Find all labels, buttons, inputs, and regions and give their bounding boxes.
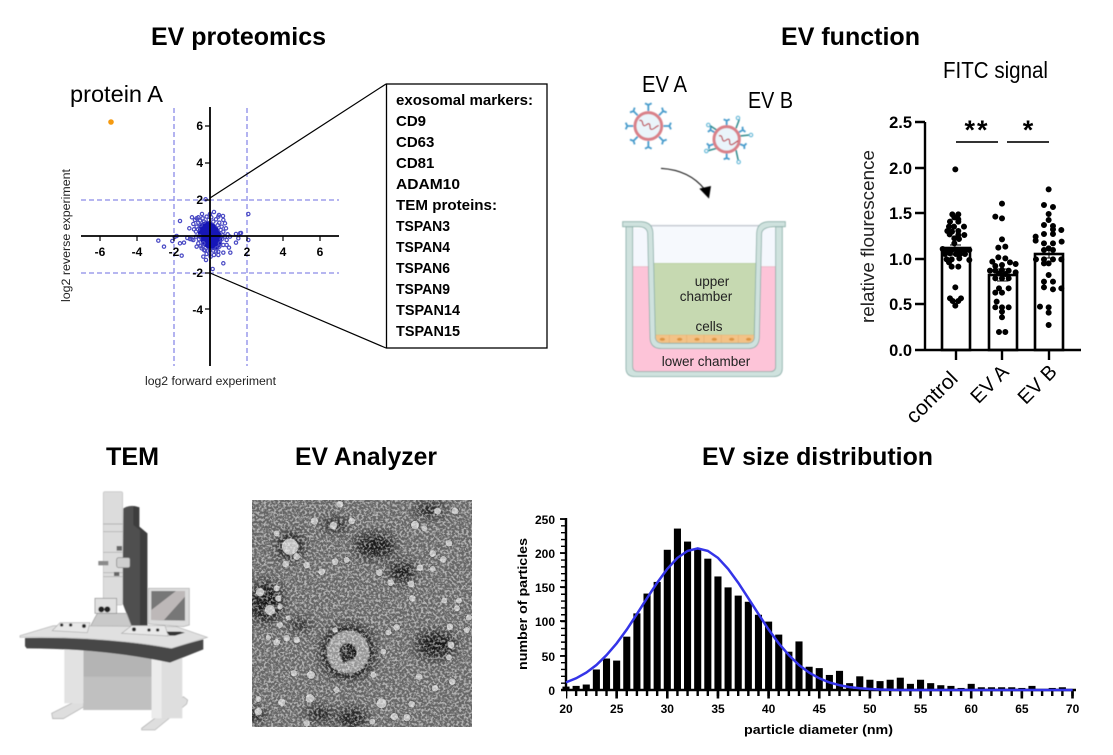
y tick labels: 2 bbox=[196, 193, 203, 207]
y tick labels: 50 bbox=[542, 650, 555, 664]
label: FITC signal: FITC signal bbox=[943, 57, 1048, 83]
transwell labels: chamber bbox=[680, 289, 733, 304]
heading: EV Analyzer: EV Analyzer bbox=[295, 443, 437, 471]
label: EV B: EV B bbox=[748, 87, 793, 113]
transwell labels: cells bbox=[695, 319, 723, 334]
vesicle particles bbox=[254, 501, 472, 727]
protein list box: TSPAN3 bbox=[396, 218, 450, 235]
gaussian fit curve bbox=[566, 548, 1073, 690]
x tick labels: 45 bbox=[813, 702, 826, 716]
zoom connector lines bbox=[210, 84, 386, 348]
y tick labels bbox=[535, 513, 555, 698]
y axis title: log2 reverse experiment bbox=[61, 168, 73, 302]
label: protein A: protein A bbox=[70, 81, 164, 107]
y tick labels: 1.5 bbox=[889, 205, 912, 223]
heading: TEM: TEM bbox=[106, 443, 159, 471]
cell layer bbox=[655, 335, 754, 343]
significance bars bbox=[956, 141, 1049, 143]
y tick labels: 6 bbox=[196, 119, 203, 133]
x tick labels: -2 bbox=[169, 245, 180, 259]
dark stain regions bbox=[245, 504, 456, 727]
protein data points bbox=[157, 198, 250, 271]
histogram bbox=[515, 513, 1080, 737]
scatter axes bbox=[81, 107, 339, 366]
y tick labels: 200 bbox=[535, 547, 555, 561]
y tick labels: 150 bbox=[535, 581, 555, 595]
y tick labels: 2.0 bbox=[889, 160, 912, 178]
x axis title: particle diameter (nm) bbox=[744, 722, 893, 737]
x tick labels: control bbox=[902, 367, 963, 428]
x tick labels: -6 bbox=[95, 245, 106, 259]
transwell labels: lower chamber bbox=[662, 354, 751, 369]
axes and ticks bbox=[915, 122, 1081, 360]
significance stars: ** bbox=[964, 115, 990, 145]
bars bbox=[942, 248, 1063, 350]
y tick labels: 2.5 bbox=[889, 114, 912, 132]
protein list box bbox=[386, 84, 547, 348]
x tick labels: 2 bbox=[244, 245, 251, 259]
y axis title: number of particles bbox=[515, 538, 530, 670]
protein list box: TSPAN14 bbox=[396, 302, 461, 319]
bar chart: relative fluorescence bbox=[858, 114, 1081, 428]
protein list box: CD63 bbox=[396, 134, 434, 151]
x tick labels: EV A bbox=[967, 361, 1014, 408]
grain texture bbox=[252, 500, 472, 727]
y tick labels: 100 bbox=[535, 615, 555, 629]
x tick labels: 55 bbox=[914, 702, 928, 716]
x tick labels: 50 bbox=[863, 702, 877, 716]
protein list box: TSPAN9 bbox=[396, 281, 450, 298]
x tick labels: 70 bbox=[1066, 702, 1080, 716]
histogram axes and ticks bbox=[560, 518, 1076, 695]
micrograph bbox=[245, 500, 472, 727]
y axis title: relative flourescence bbox=[858, 150, 878, 323]
panel: EV Analyzer bbox=[245, 443, 472, 727]
icon: EV B vesicle bbox=[705, 116, 753, 164]
x tick labels bbox=[559, 702, 1080, 716]
upper chamber liquid bbox=[653, 263, 757, 335]
threshold dashed lines bbox=[81, 108, 339, 366]
x tick labels: EV B bbox=[1014, 361, 1062, 409]
y tick labels: 0.5 bbox=[889, 296, 912, 314]
heading: EV function: EV function bbox=[781, 23, 920, 51]
protein list box: TSPAN6 bbox=[396, 260, 450, 277]
x tick labels: 65 bbox=[1015, 702, 1029, 716]
x tick labels: 35 bbox=[711, 702, 725, 716]
transwell diagram bbox=[623, 222, 785, 377]
y tick labels: 1.0 bbox=[889, 251, 912, 269]
y tick labels: 0.0 bbox=[889, 342, 912, 360]
panel: EV size distribution bbox=[515, 443, 1080, 737]
x tick labels: 25 bbox=[610, 702, 624, 716]
protein list box: TEM proteins: bbox=[396, 197, 497, 214]
y tick labels bbox=[889, 114, 912, 360]
membrane bbox=[658, 339, 752, 353]
x tick labels: 6 bbox=[317, 245, 324, 259]
icon: electron microscope bbox=[20, 492, 207, 730]
transwell labels: upper bbox=[695, 274, 730, 289]
panel: EV proteomics bbox=[61, 23, 547, 388]
y tick labels bbox=[192, 119, 203, 317]
protein A point bbox=[108, 119, 114, 125]
y tick labels: 4 bbox=[196, 156, 203, 170]
heading: EV proteomics: EV proteomics bbox=[151, 23, 326, 51]
x tick labels: 4 bbox=[280, 245, 287, 259]
protein list box: ADAM10 bbox=[396, 176, 460, 193]
protein list box: exosomal markers: bbox=[396, 92, 533, 109]
x tick labels: 60 bbox=[965, 702, 978, 716]
y tick labels: -4 bbox=[192, 303, 203, 317]
panel: TEM bbox=[20, 443, 207, 730]
x axis title: log2 forward experiment bbox=[145, 376, 277, 388]
icon: EV A vesicle bbox=[626, 103, 671, 149]
significance stars bbox=[964, 115, 1034, 145]
transwell labels bbox=[662, 274, 751, 369]
y tick labels: -2 bbox=[192, 266, 203, 280]
arrow bbox=[661, 168, 711, 199]
x tick labels bbox=[902, 361, 1062, 428]
x tick labels: -4 bbox=[132, 245, 143, 259]
x tick labels bbox=[95, 245, 324, 259]
label: EV A: EV A bbox=[642, 71, 688, 97]
panel: EV function bbox=[623, 23, 1081, 428]
y tick labels: 0 bbox=[548, 684, 555, 698]
x tick labels: 30 bbox=[661, 702, 674, 716]
y tick labels: 250 bbox=[535, 513, 555, 527]
protein list box: CD81 bbox=[396, 155, 434, 172]
histogram bars bbox=[562, 529, 1066, 690]
x tick labels: 20 bbox=[559, 702, 573, 716]
heading: EV size distribution: EV size distribution bbox=[702, 443, 933, 471]
x tick labels: 40 bbox=[762, 702, 776, 716]
error bars bbox=[950, 245, 1055, 281]
significance stars: * bbox=[1023, 115, 1034, 145]
insert walls bbox=[623, 222, 785, 349]
icons and transwell bbox=[623, 103, 785, 377]
scatter plot bbox=[61, 107, 339, 388]
data dots bbox=[940, 167, 1064, 335]
protein list box: TSPAN15 bbox=[396, 323, 460, 340]
large ring vesicle bbox=[333, 637, 363, 667]
protein list box: TSPAN4 bbox=[396, 239, 451, 256]
protein list box: CD9 bbox=[396, 113, 426, 130]
